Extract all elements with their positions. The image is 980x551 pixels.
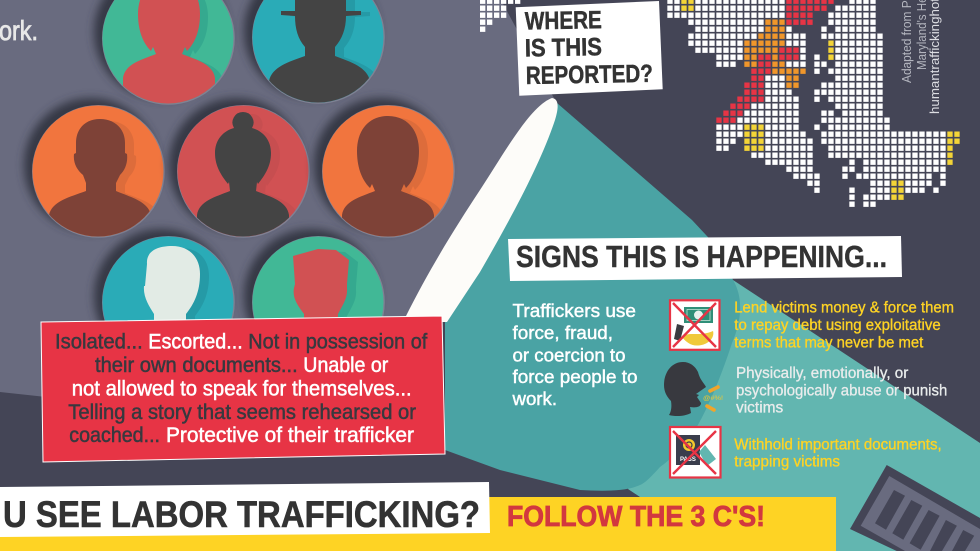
map: white squares [667, 1, 946, 204]
banner: see labor trafficking heading [0, 482, 490, 537]
icon: crossed out passport: PASS [680, 457, 696, 463]
icon: crossed out money and handshake [670, 300, 720, 350]
icon: crossed out passport [670, 427, 720, 478]
text fragment: work: ork. [0, 15, 38, 46]
portrait: man on orange [24, 98, 165, 243]
portrait: woman with bun on red [169, 98, 310, 243]
text block: traffickers use force: force, fraud, [512, 322, 613, 343]
text block: traffickers use force: work. [511, 388, 557, 409]
text: physically abuse [736, 365, 947, 417]
text: withhold documents: Withhold important documents, [734, 436, 942, 454]
banner: yellow call to action [0, 497, 836, 551]
flashlight white beam edge [403, 98, 558, 322]
text: lend victims money: to repay debt using exploitative [734, 317, 941, 334]
callout: red warning signs: coached... [69, 424, 160, 447]
light teal beam area [628, 280, 980, 551]
callout: red warning signs [41, 316, 445, 462]
heading: signs this is happening [508, 236, 902, 281]
text: lend victims money [734, 300, 954, 352]
portrait: pale silhouette on teal [90, 224, 235, 321]
callout: red warning signs: Not in possession of [248, 330, 427, 354]
map source credit: humantraffickinghot [927, 0, 942, 114]
map source credit [900, 0, 942, 114]
icon: shouting head [664, 362, 723, 416]
dot map of reporting [480, 1, 960, 204]
portrait: woman on orange [314, 98, 455, 243]
callout: red warning signs: Isolated... [55, 330, 143, 354]
callout: where is this reported: IS THIS [525, 33, 602, 62]
text: lend victims money: Lend victims money & force them [734, 300, 954, 316]
map: yellow squares [681, 1, 960, 197]
banner: yellow call to action: FOLLOW THE 3 C'S! [507, 501, 765, 533]
callout: where is this reported [516, 1, 663, 96]
icon: shipping container [850, 465, 980, 551]
portrait: red silhouette on green [240, 224, 385, 318]
callout: red warning signs: their own documents... [95, 354, 298, 377]
text: withhold documents: trapping victims [734, 453, 840, 470]
callout: red warning signs: Unable or [303, 354, 388, 377]
text block: traffickers use force: or coercion to [512, 344, 626, 366]
callout: red warning signs: Telling a story that seems rehearsed or [68, 401, 416, 424]
text block: traffickers use force: force people to [512, 366, 638, 387]
callout: red warning signs: Escorted... [148, 330, 243, 354]
text: physically abuse: Physically, emotionally, or [736, 365, 908, 382]
callout: red warning signs: Protective of their trafficker [166, 424, 414, 447]
callout: where is this reported: WHERE [525, 6, 602, 35]
text: lend victims money: terms that may never be met [734, 334, 924, 352]
map: left fragment [480, 1, 520, 29]
map: orange squares [744, 22, 806, 85]
text block: traffickers use force: Traffickers use [512, 300, 636, 321]
portrait: woman with red silhouette on green [94, 0, 235, 107]
callout: red warning signs: not allowed to speak for themselves... [72, 378, 412, 400]
callout: where is this reported: REPORTED? [526, 60, 653, 90]
banner: see labor trafficking heading: U SEE LABOR TRAFFICKING? [3, 494, 480, 535]
map: red squares [716, 1, 834, 120]
text: physically abuse: victims [736, 400, 784, 417]
text: physically abuse: psychologically abuse or punish [736, 382, 947, 399]
icon: shouting head: @#%! [703, 395, 723, 402]
panel: grey backdrop [0, 0, 555, 436]
text: withhold documents [734, 436, 942, 470]
portrait: man in hat on teal [244, 0, 385, 108]
heading: signs this is happening: SIGNS THIS IS HAPPENING... [516, 239, 887, 274]
dark teal spotlight beam [445, 103, 740, 491]
text block: traffickers use force [511, 300, 638, 409]
